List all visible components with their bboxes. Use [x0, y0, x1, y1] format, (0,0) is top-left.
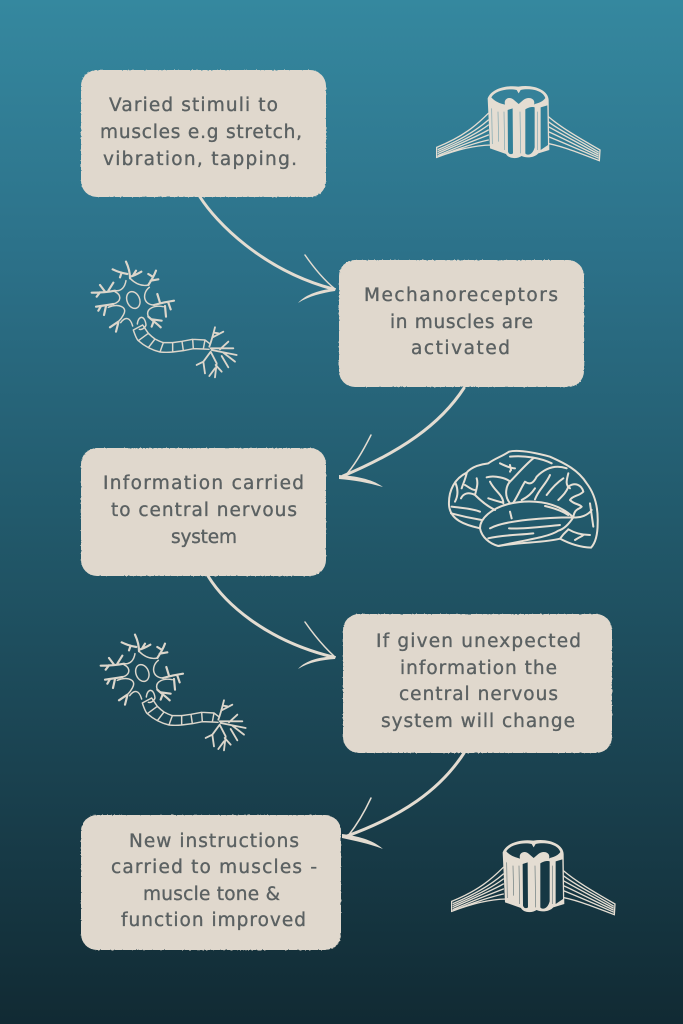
- box: varied stimuli: [81, 70, 326, 197]
- box: new instructions: [81, 815, 341, 950]
- box: varied stimuli: vibration, tapping.: [103, 149, 297, 170]
- box: new instructions: muscle tone &: [143, 884, 280, 905]
- box: information carried: system: [171, 527, 237, 548]
- icon: spinal cord bottom: [452, 840, 615, 915]
- box: unexpected information: information the: [400, 658, 557, 679]
- icon: brain: [449, 451, 598, 548]
- box: mechanoreceptors: [339, 260, 584, 387]
- arrow: information to unexpected: [208, 576, 336, 669]
- arrow: stimuli to mechanoreceptors: [200, 197, 336, 303]
- box: information carried: to central nervous: [111, 500, 297, 521]
- box: information carried: [81, 448, 326, 576]
- box: varied stimuli: muscles e.g stretch,: [100, 122, 302, 143]
- box: unexpected information: [343, 614, 612, 753]
- icon: neuron top: [92, 262, 237, 377]
- box: mechanoreceptors: activated: [411, 338, 510, 359]
- box: mechanoreceptors: in muscles are: [390, 312, 533, 333]
- box: unexpected information: system will change: [381, 711, 575, 732]
- arrow: unexpected to new instructions: [342, 753, 464, 849]
- box: new instructions: function improved: [121, 910, 306, 931]
- box: information carried: Information carried: [103, 473, 304, 494]
- box: new instructions: carried to muscles -: [111, 857, 317, 878]
- icon: neuron bottom: [101, 635, 246, 750]
- box: new instructions: New instructions: [129, 831, 299, 852]
- box: unexpected information: If given unexpected: [376, 631, 581, 652]
- box: varied stimuli: Varied stimuli to: [109, 95, 278, 116]
- box: unexpected information: central nervous: [399, 684, 558, 705]
- icon: spinal cord top: [437, 86, 600, 161]
- arrow: mechanoreceptors to information: [339, 388, 464, 487]
- box: mechanoreceptors: Mechanoreceptors: [364, 285, 558, 306]
